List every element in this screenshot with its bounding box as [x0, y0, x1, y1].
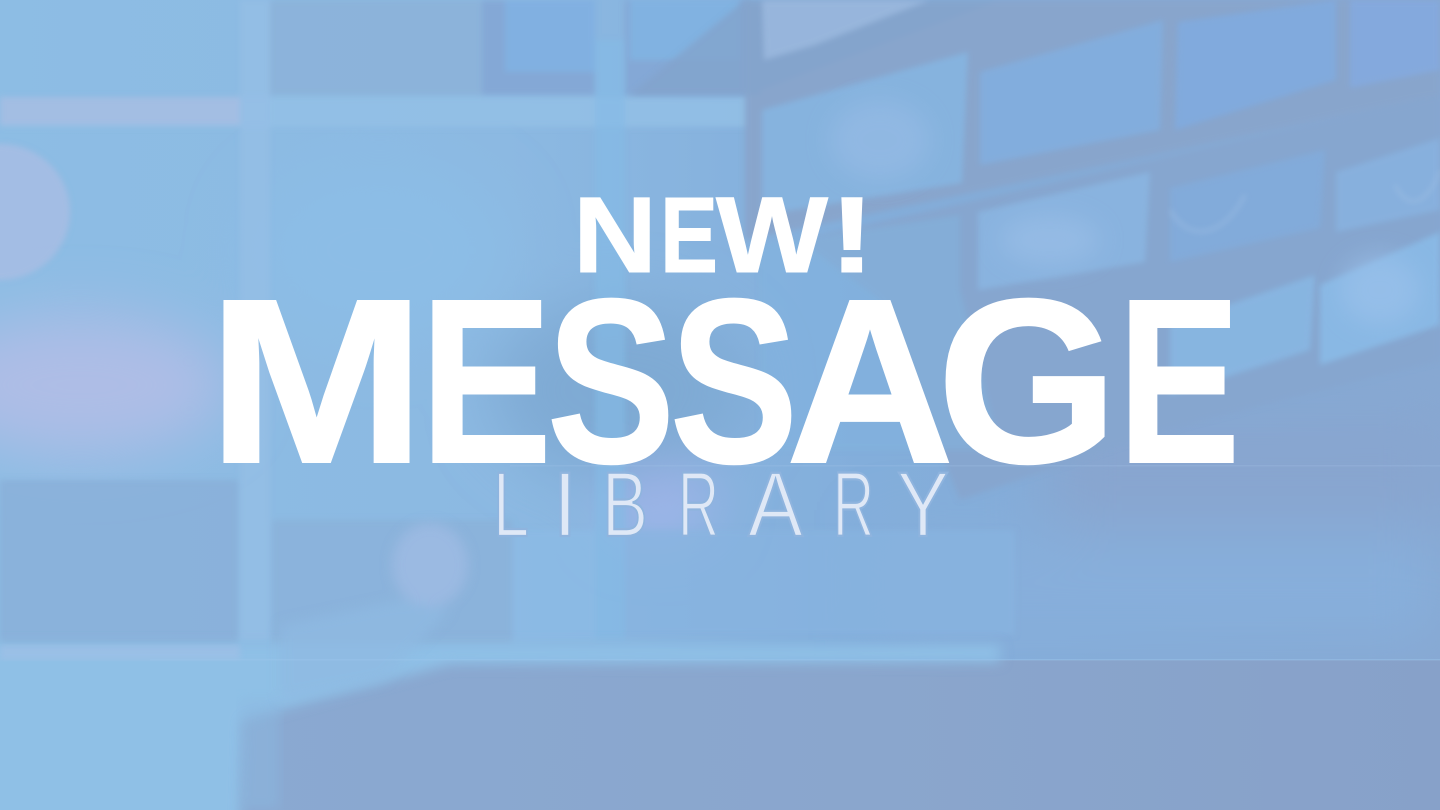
heading: LIBRARY: Y	[897, 454, 949, 556]
heading: MESSAGE: M	[207, 250, 426, 512]
background: floor	[0, 660, 1440, 810]
heading: NEW!: !	[829, 174, 875, 295]
heading: LIBRARY: L	[493, 454, 529, 556]
heading: MESSAGE: E	[1118, 250, 1240, 512]
background: screens	[760, 0, 1440, 450]
background: dark wall frames	[630, 0, 1440, 500]
heading: MESSAGE: S	[547, 250, 675, 512]
background: left side panels	[0, 0, 1015, 645]
heading: MESSAGE: A	[786, 250, 954, 512]
heading: NEW!: E	[660, 174, 718, 295]
heading: NEW!: N	[573, 174, 657, 295]
heading: LIBRARY: B	[602, 454, 648, 556]
heading: LIBRARY: R	[833, 454, 874, 556]
background: screen content	[1170, 170, 1440, 231]
background: silhouette of a person	[280, 523, 468, 700]
heading: LIBRARY: A	[748, 454, 804, 556]
heading: LIBRARY: I	[552, 454, 578, 556]
heading: MESSAGE: E	[420, 250, 552, 512]
heading: NEW!: W	[716, 174, 828, 295]
heading: LIBRARY: R	[678, 454, 719, 556]
heading: MESSAGE: S	[670, 250, 798, 512]
heading: MESSAGE: G	[937, 250, 1118, 512]
